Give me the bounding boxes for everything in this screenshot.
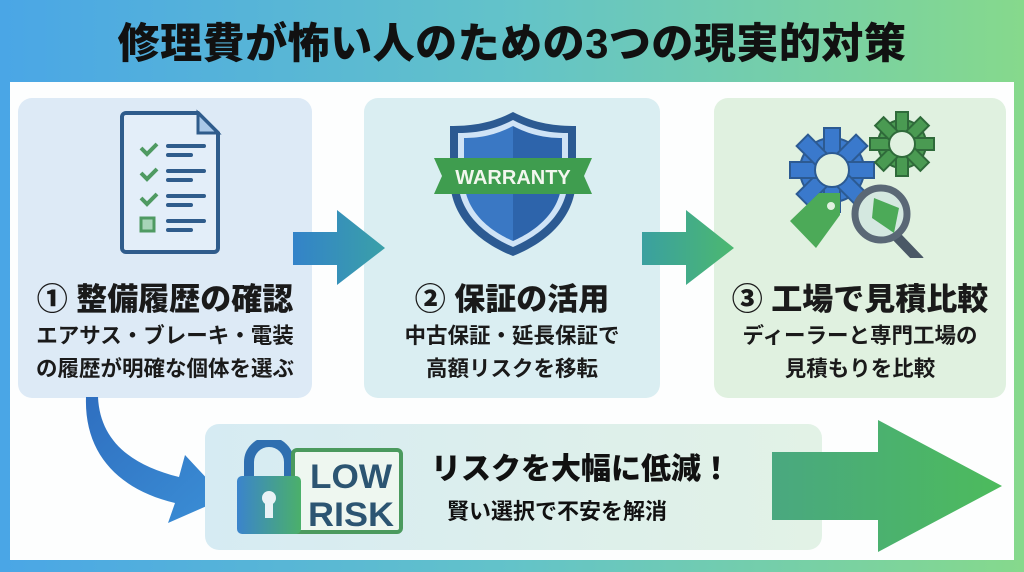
panel: result banner <box>205 424 822 550</box>
heading 3: ③ 工場で見積比較 <box>732 282 988 317</box>
icon: warranty shield <box>434 112 592 256</box>
text 3: 見積もりを比較 <box>785 357 935 381</box>
text 3: ディーラーと専門工場の <box>742 324 978 348</box>
icon: warranty shield: WARRANTY <box>455 167 571 189</box>
arrow 2 <box>642 210 734 285</box>
heading 1: ① 整備履歴の確認 <box>37 282 293 317</box>
title: 修理費が怖い人のための3つの現実的対策 <box>118 20 906 67</box>
curved arrow <box>86 397 205 523</box>
text 1: エアサス・ブレーキ・電装 <box>36 324 294 348</box>
big arrow <box>772 420 1002 552</box>
banner heading: リスクを大幅に低減！ <box>431 453 731 486</box>
banner subtext: 賢い選択で不安を解消 <box>447 499 667 524</box>
text 2 <box>404 324 620 381</box>
text 1: の履歴が明確な個体を選ぶ <box>36 357 294 381</box>
icon: low risk lock <box>237 440 403 534</box>
panel: step 2 <box>364 98 660 398</box>
text 3 <box>742 324 978 381</box>
heading 2: ② 保証の活用 <box>415 282 609 317</box>
icon: low risk lock: LOW <box>310 458 393 496</box>
text 2: 高額リスクを移転 <box>426 357 598 381</box>
icon: gears and magnifier <box>789 111 935 258</box>
icon: checklist document <box>120 110 222 254</box>
icon: low risk lock: RISK <box>308 496 394 534</box>
panel: step 1 <box>18 98 312 398</box>
text 2: 中古保証・延長保証で <box>404 324 620 348</box>
text 1 <box>36 324 294 381</box>
panel: step 3 <box>714 98 1006 398</box>
arrow 1 <box>293 210 385 285</box>
